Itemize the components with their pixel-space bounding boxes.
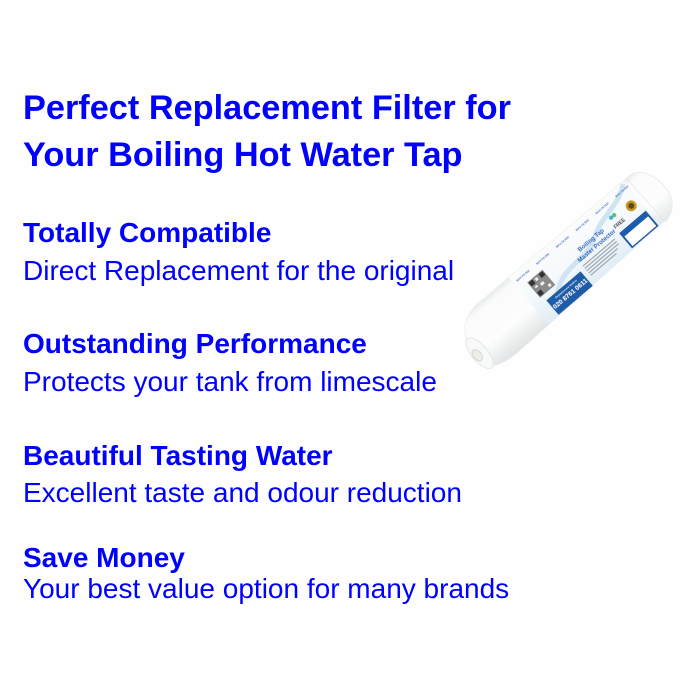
title: Your Boiling Hot Water Tap [23,136,462,174]
title [23,89,511,174]
model code row [515,185,630,283]
write-on panel [619,211,659,248]
FREE badge: FREE [613,217,627,231]
bottom end flange [461,334,498,373]
small print lines [582,239,623,276]
benefit: save money [23,542,509,604]
water swoosh artwork [532,184,649,292]
product name: Master Protector [577,228,618,264]
benefit: totally compatible [23,217,454,286]
model code row: MAX FILTER [535,252,550,266]
description: Direct Replacement for the original [23,255,454,286]
icon: water droplets [608,212,617,221]
water outlet nozzle [470,348,485,363]
description: Your best value option for many brands [23,573,509,604]
phone number panel [546,271,593,315]
benefit: outstanding performance [23,328,437,397]
model code row: MAX FILTER [595,201,610,215]
heading: Outstanding Performance [23,328,367,359]
heading: Beautiful Tasting Water [23,440,333,471]
top end cap [626,163,682,223]
phone number panel: Replacement Hotline [554,278,578,299]
product name: Boiling Tap [577,228,606,254]
product image: inline water filter cartridge [448,162,685,377]
phone number panel: 020 8761 0611 [552,277,589,311]
heading: Totally Compatible [23,217,271,248]
description: Protects your tank from limescale [23,366,437,397]
model code row: MAX FILTER [614,185,630,198]
product label [509,180,663,325]
QR code [527,270,555,298]
model code row: MAX FILTER [555,235,570,249]
filter body [454,175,670,372]
icon: gold seal [623,198,639,214]
title: Perfect Replacement Filter for [23,89,511,127]
model code row: MAX FILTER [575,218,590,232]
description: Excellent taste and odour reduction [23,477,462,508]
heading: Save Money [23,542,185,573]
model code row: MAX FILTER [515,269,531,283]
benefit: beautiful tasting water [23,440,462,508]
